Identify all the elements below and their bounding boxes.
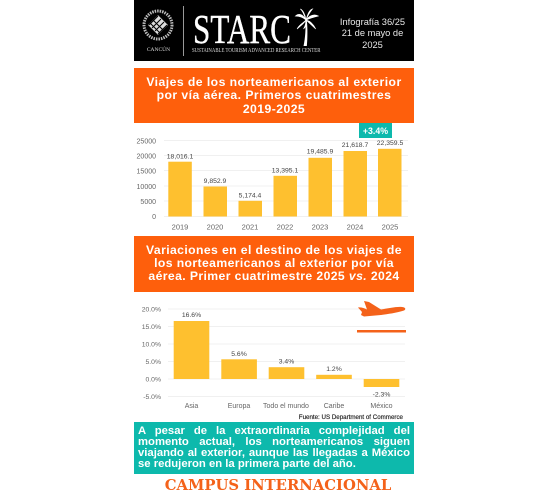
bar value labels: 18,016.1 [167, 154, 193, 160]
x axis labels: Todo el mundo [263, 403, 309, 410]
bar value labels: 21,618.7 [342, 142, 368, 149]
y axis labels: 5000 [140, 199, 156, 206]
bar value labels [182, 312, 390, 398]
date text [340, 17, 405, 50]
header band [134, 0, 414, 61]
heading: chart 2 title: Variaciones en el destino de los viajes de [146, 242, 402, 256]
y axis labels: 20000 [137, 154, 156, 160]
bar value labels: 9,852.9 [204, 178, 227, 185]
bars [174, 321, 399, 387]
x axis labels: 2021 [242, 222, 258, 232]
heading: chart 2 title: aérea. Primer cuatrimestre 2025 vs. 2024 [148, 269, 400, 283]
conclusion text block [134, 422, 414, 474]
date text: Infografía 36/25 [340, 17, 405, 27]
source: Fuente: US Department of Commerce [299, 414, 404, 421]
x axis labels: 2025 [382, 222, 398, 232]
heading: chart 2 title: los norteamericanos al exterior por vía [154, 256, 394, 270]
x axis labels [185, 403, 393, 410]
divider [183, 6, 184, 56]
y axis labels: 15000 [137, 168, 156, 176]
bar value labels: 19,485.9 [307, 148, 333, 156]
bar value labels [167, 140, 403, 200]
y axis labels [137, 138, 156, 221]
date text: 21 de mayo de [342, 28, 403, 38]
bars [168, 149, 402, 216]
heading: chart 1 title: por vía aérea. Primeros cuatrimestres [157, 88, 391, 102]
y axis labels: 10000 [137, 184, 156, 191]
logo: STARC wordmark: STARC [193, 6, 291, 52]
y axis labels: 15.0% [142, 324, 161, 331]
bar value labels: 16.6% [182, 312, 201, 319]
x axis labels: 2019 [172, 222, 188, 232]
logo: university seal: CANCÚN [147, 45, 170, 53]
y axis labels: 10.0% [142, 342, 161, 348]
x axis labels: 2024 [347, 222, 363, 232]
conclusion text block: se redujeron en la primera parte del año. [138, 458, 356, 470]
y axis labels: 5.0% [146, 359, 161, 366]
conclusion text block: viajando al exterior, aunque las llegadas a México [138, 447, 410, 459]
callout: +3.4% [359, 123, 392, 138]
x axis labels [172, 222, 398, 232]
y axis labels: 20.0% [142, 306, 161, 314]
bar value labels: -2.3% [373, 392, 390, 398]
y axis labels [142, 306, 161, 401]
bar chart: destination variation [142, 301, 406, 421]
x axis labels: 2022 [277, 222, 293, 232]
y axis labels: -5.0% [143, 394, 161, 401]
heading: chart 1 title: Viajes de los norteamericanos al exterior [146, 75, 402, 89]
bar chart: trips 2019-2025 [136, 138, 408, 232]
heading: chart 1 title: 2019-2025 [243, 102, 305, 116]
conclusion text block: momento actual, los norteamericanos siguen [138, 436, 410, 448]
bar value labels: 1.2% [326, 366, 342, 373]
x axis labels: 2020 [207, 222, 223, 232]
date text: 2025 [362, 40, 383, 50]
x axis labels: Europa [228, 403, 250, 410]
heading: chart 1 title [134, 68, 414, 123]
bar value labels: 22,359.5 [377, 140, 403, 147]
logo: university seal [142, 10, 174, 53]
y axis labels: 25000 [137, 138, 156, 146]
x axis labels: México [370, 403, 393, 410]
footer: campus internacional: CAMPUS INTERNACIONAL [165, 477, 391, 494]
bar value labels: 3.4% [279, 358, 294, 366]
heading: chart 2 title [134, 236, 414, 292]
callout: +3.4%: +3.4% [363, 126, 388, 136]
bar value labels: 5.6% [231, 351, 247, 358]
runway line [357, 330, 406, 332]
y axis labels: 0 [152, 214, 156, 221]
icon: palm tree [294, 8, 319, 46]
bar value labels: 13,395.1 [272, 168, 298, 174]
conclusion text block: A pesar de la extraordinaria complejidad del [138, 424, 410, 436]
y axis labels: 0.0% [146, 376, 161, 384]
bar value labels: 5,174.4 [239, 192, 262, 200]
x axis labels: 2023 [312, 222, 328, 232]
x axis labels: Asia [185, 403, 198, 410]
icon: airplane [358, 301, 405, 316]
logo: STARC wordmark: SUSTAINABLE TOURISM ADVANCED RESEARCH CENTER [192, 48, 320, 54]
x axis labels: Caribe [324, 403, 344, 410]
